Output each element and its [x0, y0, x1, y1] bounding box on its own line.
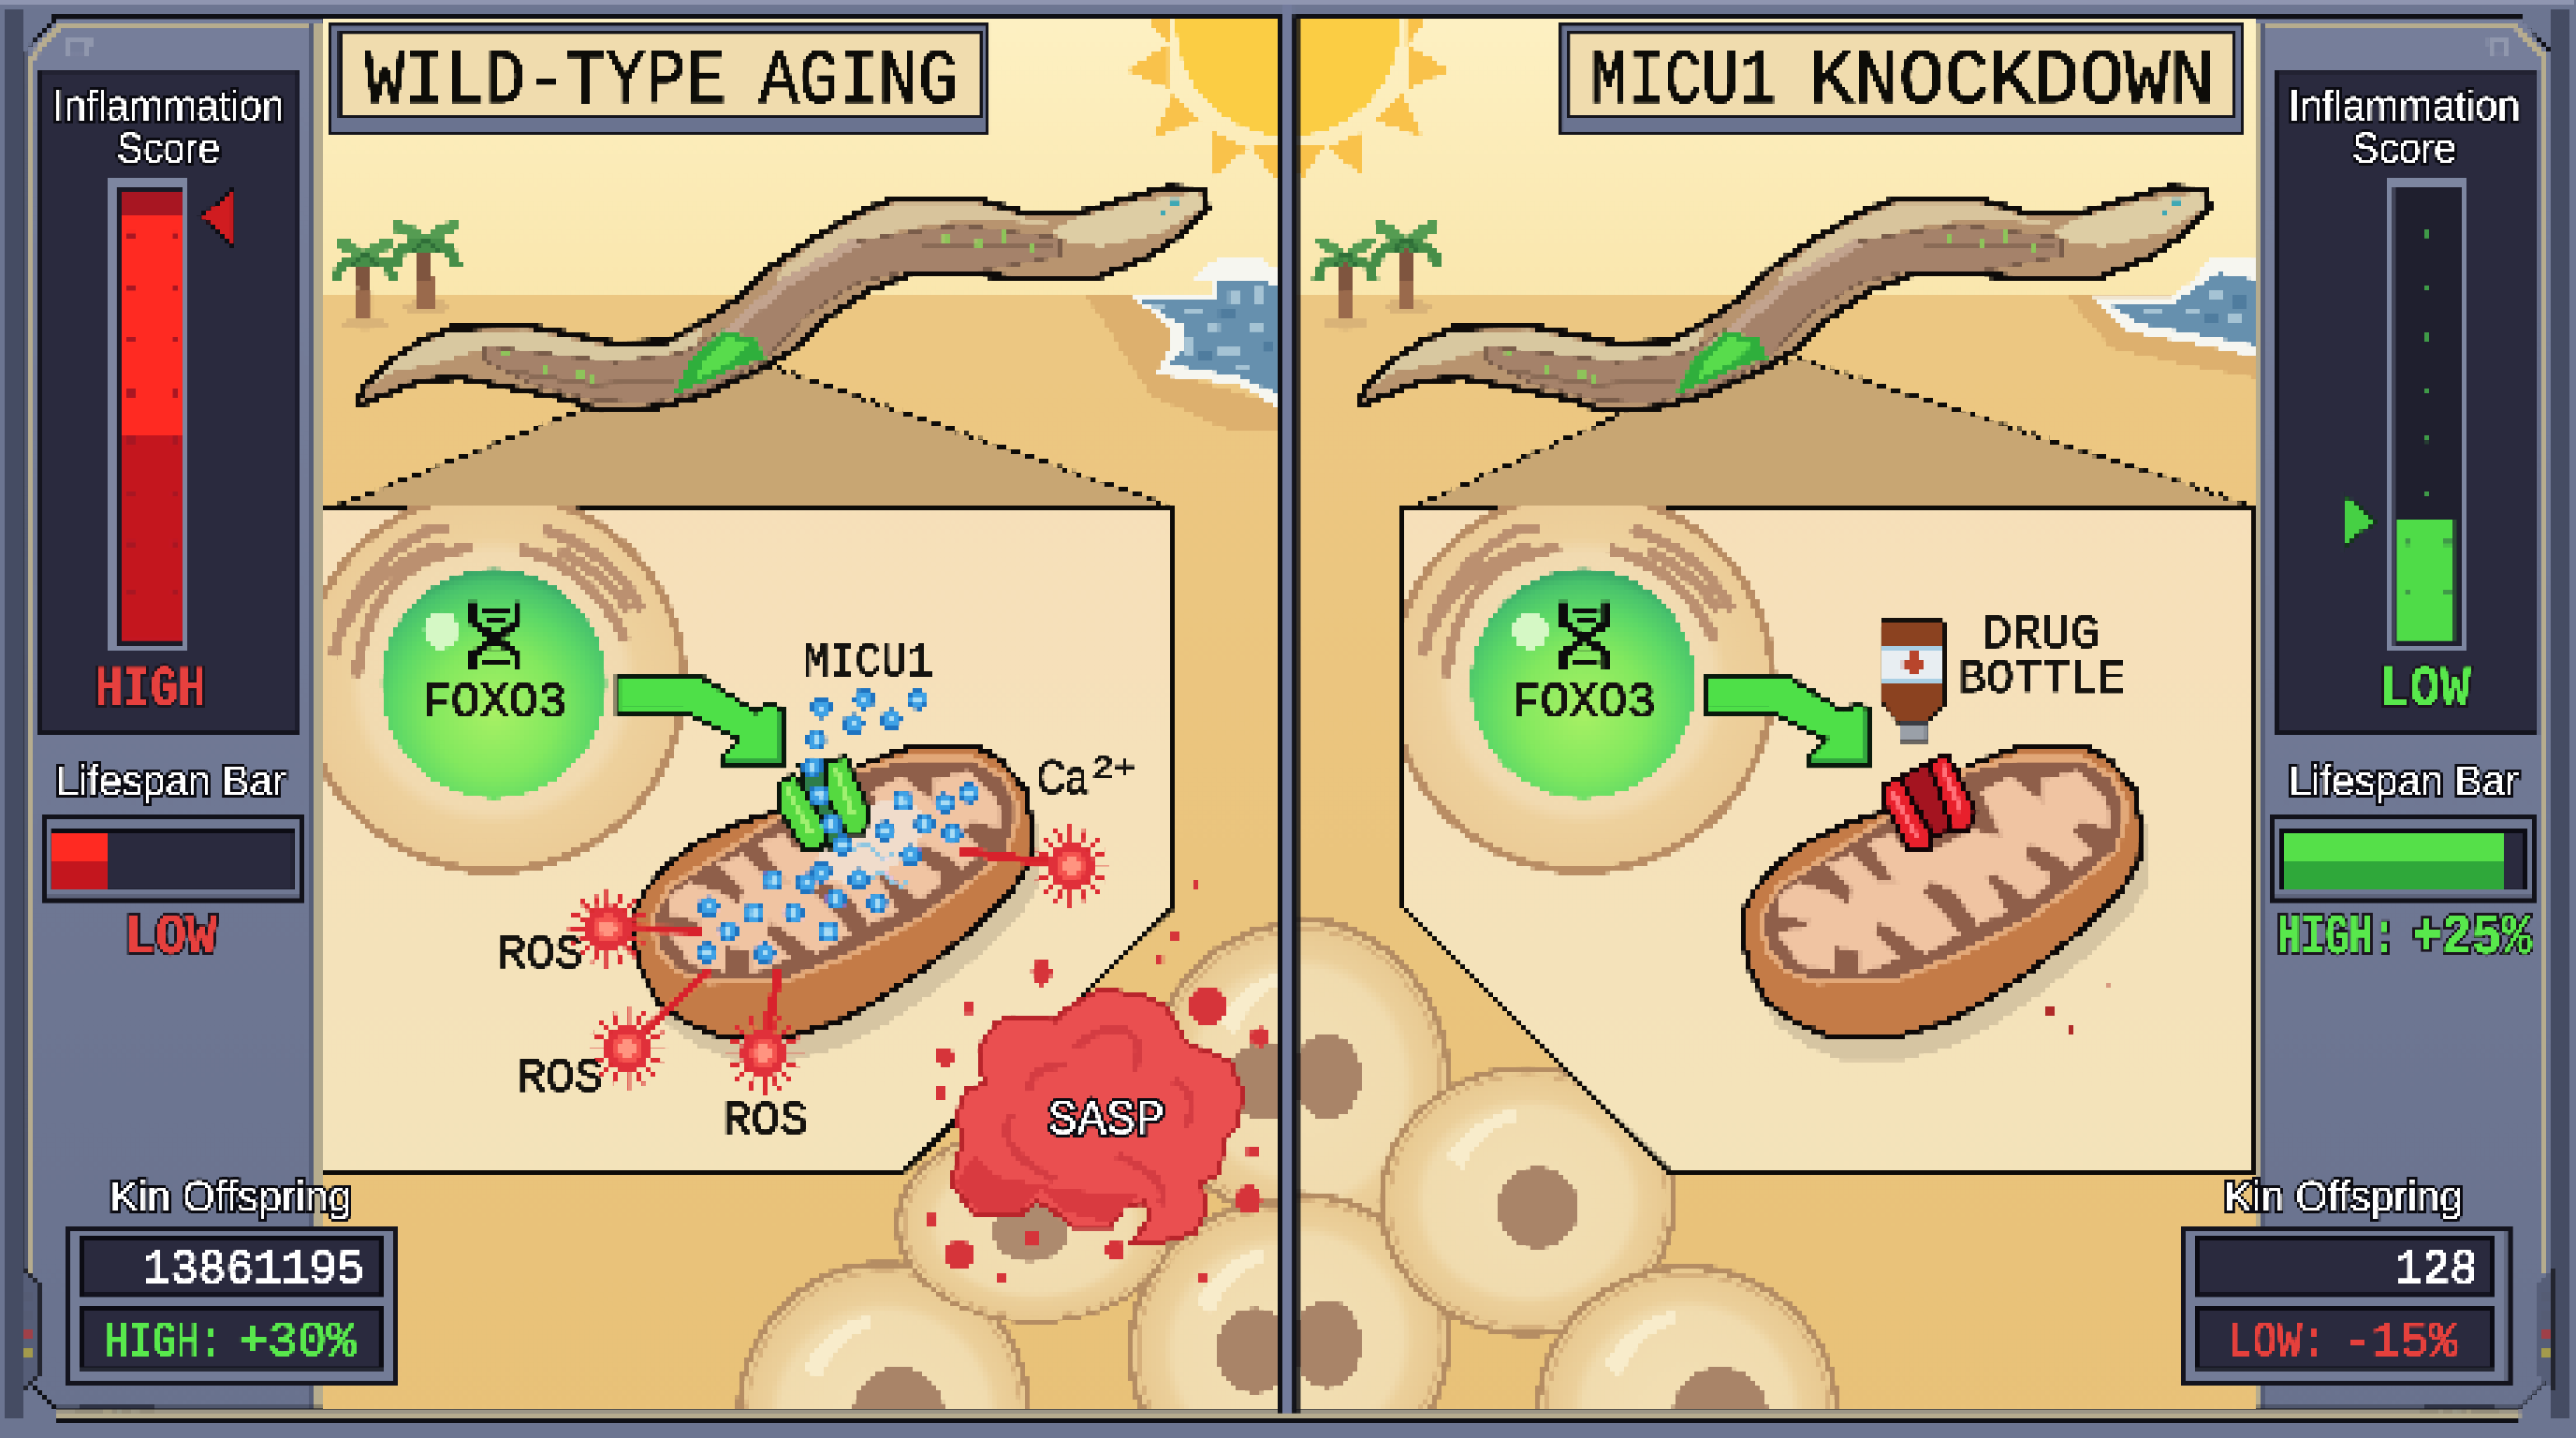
cell: upper left [1147, 918, 1449, 1250]
value: offspring change: LOW: [2228, 1314, 2326, 1371]
inflammation gauge: high [111, 183, 185, 648]
arrow: FOXO3 to drug target [1705, 677, 1871, 768]
gauge marker [200, 189, 233, 246]
value: HIGH: HIGH [95, 658, 205, 723]
value: HIGH +25%: HIGH: [2277, 906, 2397, 971]
title plate: MICU1 knockdown: MICU1 [1590, 37, 1776, 125]
value: offspring change: -15% [2343, 1314, 2458, 1371]
value: HIGH +25% [2277, 906, 2532, 971]
right HUD text [2224, 81, 2532, 1371]
inset panel [322, 506, 1173, 1171]
magnifier beam [1416, 359, 2254, 506]
value: HIGH +25%: +25% [2411, 906, 2532, 971]
value: LOW: LOW [2378, 658, 2471, 723]
cell: behind SASP cloud [898, 1126, 1173, 1322]
heading: inflammation score [2289, 81, 2520, 172]
ocean wave [1084, 257, 1278, 431]
mitochondrion [1744, 747, 2150, 1061]
kin offspring readout [69, 1227, 394, 1382]
title plate: MICU1 knockdown: KNOCKDOWN [1808, 37, 2215, 125]
FOXO3 cell [302, 493, 683, 871]
inset panel [1403, 506, 2254, 1171]
icon: DNA helix [1563, 601, 1606, 670]
cell: upper right [1165, 922, 1278, 1208]
heading: kin offspring: Kin Offspring [110, 1173, 352, 1221]
icon: DNA helix [474, 601, 518, 670]
inflammation gauge: low [2391, 183, 2465, 648]
title plate: MICU1 knockdown [1560, 24, 2243, 133]
heading: inflammation score: Score [2352, 125, 2456, 172]
worm [358, 187, 1208, 411]
heading: lifespan bar: Lifespan Bar [2289, 756, 2519, 804]
ocean wave [2067, 258, 2254, 378]
title plate: wild-type aging [330, 24, 988, 133]
magnifier beam [337, 366, 1170, 506]
icon: drug bottle [1881, 620, 1945, 741]
FOXO3 nucleus [1471, 568, 1695, 799]
SASP droplets [927, 881, 1270, 1284]
sun [1128, 19, 1278, 183]
lifespan bar: low [43, 818, 302, 899]
mitochondrion [568, 688, 1110, 1094]
SASP cloud [927, 881, 1270, 1284]
panel: MICU1 knockdown scene [1125, 0, 2254, 1413]
FOXO3 cell [1392, 493, 1773, 871]
label: Ca2+ [1036, 750, 1135, 804]
cell: lower left [1147, 1195, 1449, 1413]
label: drug bottle [1958, 609, 2126, 707]
value: offspring count: 128 [2395, 1242, 2478, 1299]
MICU1 channel [778, 756, 870, 849]
scene labels: wild-type [330, 24, 1164, 1149]
ROS tails [607, 851, 1071, 1053]
value: offspring change [105, 1314, 357, 1371]
palm trees [337, 227, 457, 330]
cell: lower right [1128, 1198, 1278, 1409]
label: FOXO3: FOXO3 [1512, 675, 1656, 731]
label: ROS lower left: ROS [518, 1052, 603, 1106]
label: MICU1: MICU1 [803, 637, 933, 690]
label: Ca2+: 2+ [1092, 750, 1135, 784]
worm [1359, 187, 2210, 411]
panel: right HUD [2184, 70, 2537, 1382]
ROS bursts [568, 825, 1110, 1094]
value: offspring change: HIGH: [105, 1314, 224, 1371]
stray specks [2047, 983, 2110, 1035]
heading: inflammation score: Inflammation [52, 81, 285, 129]
arrow: FOXO3 to MICU1 [618, 677, 783, 768]
heading: inflammation score [52, 81, 285, 172]
title plate: wild-type aging: AGING [759, 37, 958, 125]
palm trees [1317, 227, 1438, 330]
scene labels: knockdown [1512, 24, 2243, 731]
left HUD text [52, 81, 365, 1371]
value: offspring count: 13861195 [143, 1242, 365, 1299]
cell: centre [1382, 1068, 1675, 1334]
value: offspring change: +30% [238, 1314, 357, 1371]
panel: left HUD [41, 70, 394, 1382]
label: ROS left: ROS [498, 930, 583, 983]
label: SASP: SASP [1048, 1093, 1164, 1149]
value: LOW: LOW [124, 906, 217, 971]
inhibited MICU1 channel [1883, 756, 1975, 850]
label: Ca2+: Ca [1036, 751, 1088, 804]
cell: bottom [1538, 1267, 1837, 1413]
value: offspring change [2228, 1314, 2458, 1371]
inflammation panel background [41, 70, 299, 733]
title plate: wild-type aging: WILD-TYPE [365, 37, 726, 125]
label: drug bottle: DRUG [1983, 609, 2100, 663]
label: FOXO3: FOXO3 [422, 675, 567, 731]
calcium ions [696, 688, 980, 963]
panel: wild-type aging scene [323, 19, 1278, 1409]
kin offspring readout [2184, 1227, 2509, 1382]
heading: kin offspring: Kin Offspring [2224, 1173, 2463, 1221]
cell: lower centre [739, 1264, 1029, 1413]
lifespan bar: high [2272, 818, 2535, 899]
heading: inflammation score: Score [117, 125, 220, 172]
sun [1125, 0, 1451, 181]
label: ROS bottom: ROS [723, 1095, 809, 1149]
inflammation panel background [2277, 70, 2537, 733]
FOXO3 nucleus [381, 568, 607, 799]
divider between scenes [1278, 7, 1298, 1412]
gauge marker [2345, 494, 2376, 547]
heading: inflammation score: Inflammation [2289, 81, 2520, 129]
heading: lifespan bar: Lifespan Bar [56, 756, 285, 804]
label: drug bottle: BOTTLE [1958, 653, 2126, 707]
